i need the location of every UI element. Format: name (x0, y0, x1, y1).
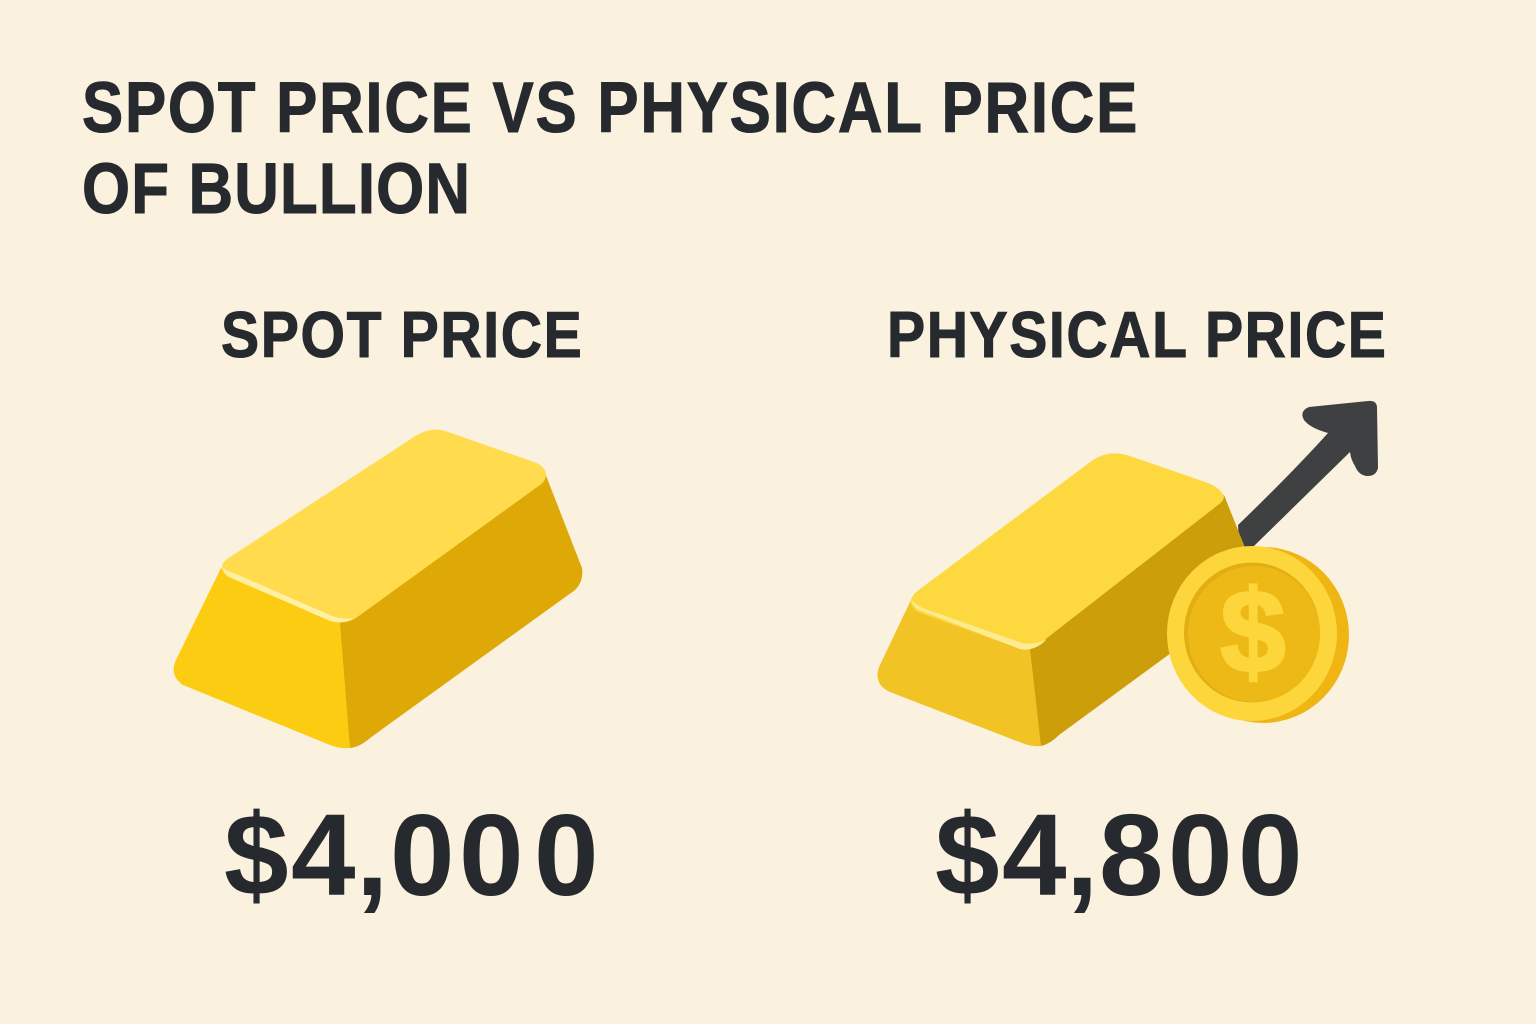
title (82, 69, 1137, 229)
top face (222, 430, 546, 622)
dollar sign: $ (1220, 566, 1286, 698)
heading: physical price: PHYSICAL PRICE (887, 299, 1386, 371)
highlight (222, 567, 354, 622)
arrow: rising price (1238, 401, 1378, 560)
left face (174, 568, 350, 748)
icon: dollar coin (1167, 546, 1349, 723)
title: OF BULLION (82, 150, 470, 229)
value: physical price: $4,800 (935, 790, 1303, 920)
coin inner (1188, 566, 1320, 702)
coin face (1167, 546, 1337, 721)
icon: physical gold bar (877, 453, 1250, 746)
icon: spot gold bar (174, 430, 582, 748)
heading: spot price: SPOT PRICE (221, 299, 582, 371)
coin inner rim (1184, 562, 1320, 702)
right face (340, 473, 582, 748)
highlight (911, 600, 1046, 650)
coin edge (1177, 547, 1349, 723)
title: SPOT PRICE VS PHYSICAL PRICE (82, 69, 1137, 148)
right face (1030, 495, 1250, 746)
left face (877, 600, 1041, 746)
value: spot price: $4,000 (224, 790, 599, 920)
top face (911, 453, 1224, 649)
